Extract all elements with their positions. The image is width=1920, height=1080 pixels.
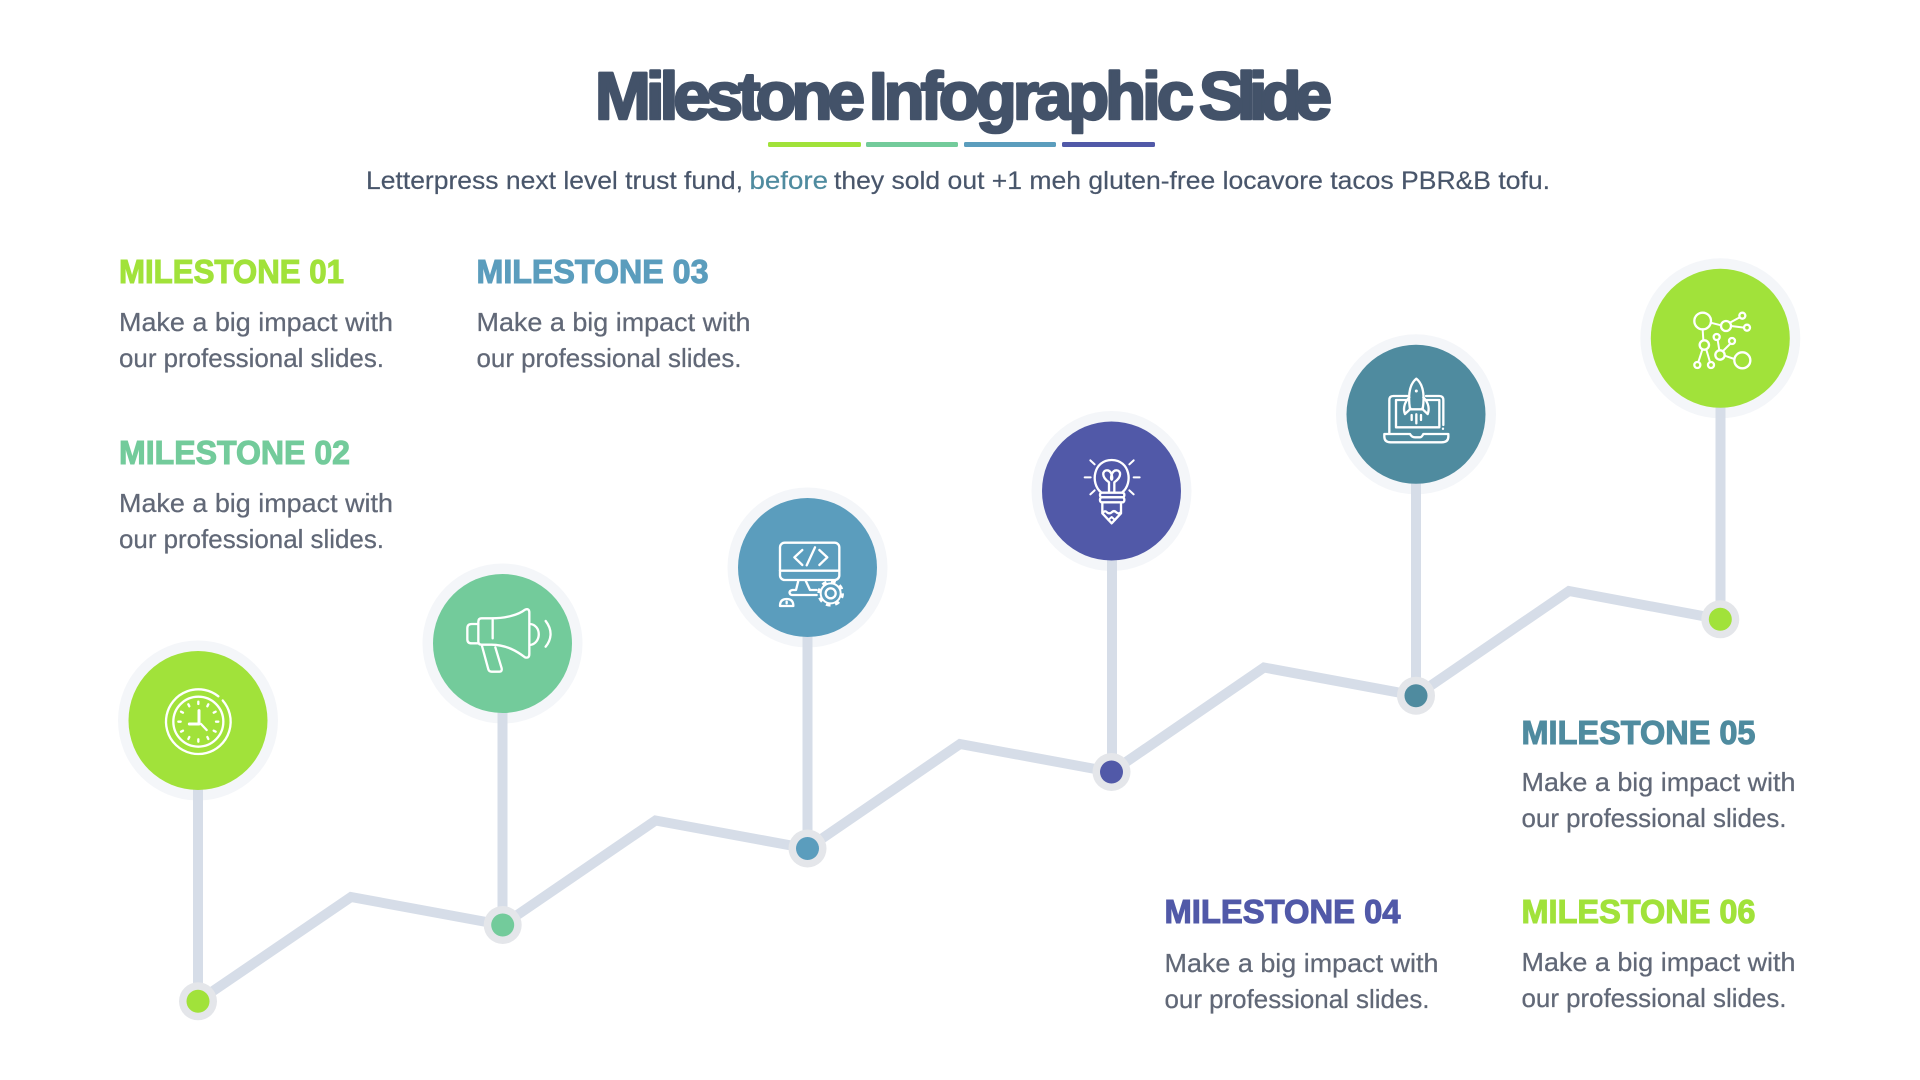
title — [595, 59, 1332, 134]
milestone 06 marker: stem, node and network icon — [1640, 258, 1800, 638]
milestone 04 text: MILESTONE 04 — [1164, 894, 1401, 931]
milestone 03 text: MILESTONE 03 — [476, 254, 708, 291]
milestone 04 marker: stem, node and light bulb icon — [1032, 411, 1192, 791]
subtitle: Letterpress next level trust fund, — [366, 167, 743, 195]
icon: clock — [166, 689, 231, 754]
icon: laptop with rocket — [1384, 379, 1448, 442]
icon: megaphone — [467, 609, 551, 672]
milestone 01 text: MILESTONE 01 — [119, 254, 344, 291]
milestone 03 text: Make a big impact with — [476, 307, 750, 337]
milestone 01 text — [119, 254, 393, 373]
milestone 01 text: Make a big impact with — [119, 307, 393, 337]
milestone 02 text: Make a big impact with — [119, 488, 393, 518]
title: Infographic — [869, 59, 1194, 134]
milestone 04 text: Make a big impact with — [1164, 948, 1438, 978]
milestone 03 marker: stem, node and monitor icon — [728, 488, 888, 868]
milestone 06 text — [1522, 894, 1796, 1013]
milestone 06 text: MILESTONE 06 — [1522, 894, 1756, 931]
milestone 04 text — [1164, 894, 1438, 1014]
milestone 05 text — [1522, 715, 1796, 833]
milestone 01 text: our professional slides. — [119, 343, 384, 373]
milestone 02 text — [119, 435, 393, 554]
title: Milestone — [595, 59, 865, 134]
milestone 02 marker: stem, node and megaphone icon — [422, 564, 582, 944]
milestone 02 text: MILESTONE 02 — [119, 435, 350, 472]
milestone 05 text: our professional slides. — [1522, 803, 1786, 833]
title: Slide — [1199, 59, 1332, 134]
milestone 05 marker: stem, node and laptop rocket icon — [1336, 334, 1496, 715]
icon: monitor with code and gear — [780, 543, 843, 606]
milestone 02 text: our professional slides. — [119, 524, 384, 554]
milestone 06 text: Make a big impact with — [1522, 947, 1796, 977]
icon: network nodes — [1694, 313, 1750, 368]
icon: light bulb pencil — [1085, 460, 1140, 523]
milestone 01 marker: stem, node and clock icon — [118, 640, 278, 1020]
milestone 05 text: MILESTONE 05 — [1522, 715, 1756, 752]
milestone 05 text: Make a big impact with — [1522, 767, 1796, 797]
title underline bars — [768, 142, 1155, 147]
milestone 04 text: our professional slides. — [1164, 984, 1430, 1014]
subtitle: before — [750, 167, 828, 195]
subtitle — [366, 167, 1550, 195]
milestone 03 text — [476, 254, 750, 373]
zigzag timeline line — [198, 591, 1720, 1001]
milestone 06 text: our professional slides. — [1522, 983, 1786, 1013]
subtitle: they sold out +1 meh gluten-free locavore tacos PBR&B tofu. — [834, 167, 1550, 195]
milestone 03 text: our professional slides. — [476, 343, 742, 373]
